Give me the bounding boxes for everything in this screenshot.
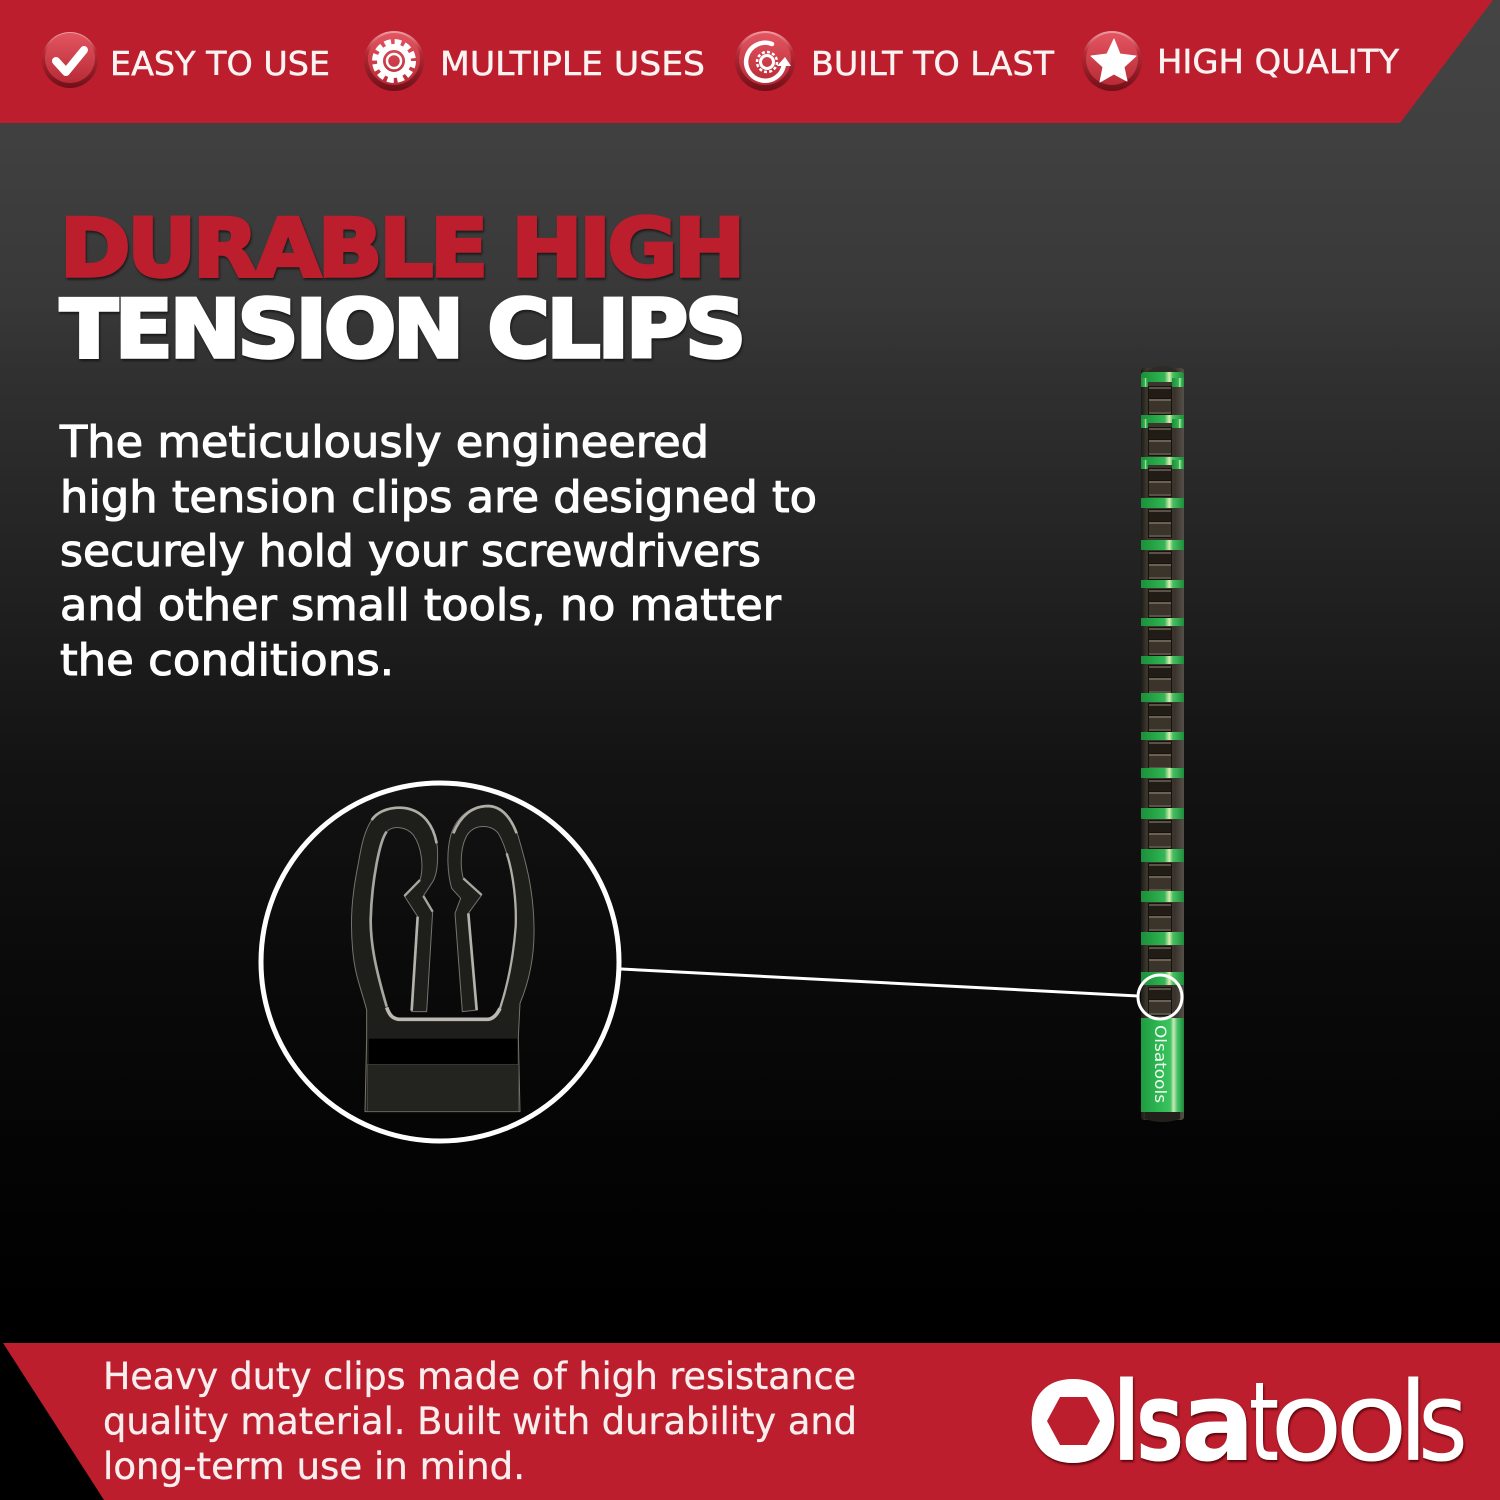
feature: multiple uses — [364, 31, 705, 91]
green base with brand: Olsatools — [1151, 1025, 1170, 1103]
clip illustration — [351, 806, 534, 1112]
description: quality material. Built with durability and — [103, 1400, 857, 1443]
logo — [1029, 1358, 1468, 1486]
icon: check mark — [42, 32, 98, 88]
logo: O — [1029, 1362, 1117, 1484]
heading: TENSION CLIPS — [60, 283, 743, 376]
green bands — [1141, 372, 1184, 985]
logo: s — [1418, 1358, 1468, 1486]
feature: high quality — [1082, 31, 1400, 91]
product: socket rail — [1138, 366, 1184, 1122]
body text: the conditions. — [60, 635, 394, 686]
green base with brand — [1141, 1018, 1184, 1122]
feature: easy to use: EASY TO USE — [110, 44, 330, 83]
body text: and other small tools, no matter — [60, 580, 782, 631]
clip cells — [1148, 386, 1172, 1016]
body text: The meticulously engineered — [59, 417, 709, 468]
top banner — [0, 0, 1493, 123]
callout: clip close-up — [261, 783, 1138, 1141]
bottom banner — [3, 1343, 1500, 1500]
description: Heavy duty clips made of high resistance — [103, 1355, 856, 1398]
logo: t — [1249, 1358, 1279, 1486]
icon: circular arrow with gear — [735, 31, 795, 91]
magnifier circle — [261, 783, 619, 1141]
icon: gear — [364, 31, 424, 91]
logo: a — [1181, 1358, 1255, 1486]
description: long-term use in mind. — [103, 1445, 525, 1488]
body text: securely hold your screwdrivers — [60, 526, 761, 577]
feature: built to last: BUILT TO LAST — [811, 44, 1055, 83]
rail body — [1141, 368, 1184, 1120]
logo: l — [1114, 1358, 1139, 1486]
rail end cap — [1143, 366, 1183, 375]
leader line — [621, 969, 1138, 996]
logo: l — [1398, 1358, 1428, 1486]
body text: high tension clips are designed to — [60, 472, 817, 523]
feature: multiple uses: MULTIPLE USES — [440, 44, 705, 83]
body text — [59, 417, 817, 686]
feature: easy to use — [42, 32, 330, 88]
logo: o — [1270, 1358, 1343, 1486]
description — [103, 1355, 857, 1488]
feature: built to last — [735, 31, 1055, 91]
logo: s — [1136, 1358, 1184, 1486]
icon: star — [1082, 31, 1142, 91]
logo: o — [1335, 1358, 1408, 1486]
highlight ring — [1138, 975, 1182, 1019]
heading: DURABLE HIGH — [60, 202, 742, 295]
feature: high quality: HIGH QUALITY — [1157, 42, 1400, 81]
heading — [60, 202, 743, 376]
